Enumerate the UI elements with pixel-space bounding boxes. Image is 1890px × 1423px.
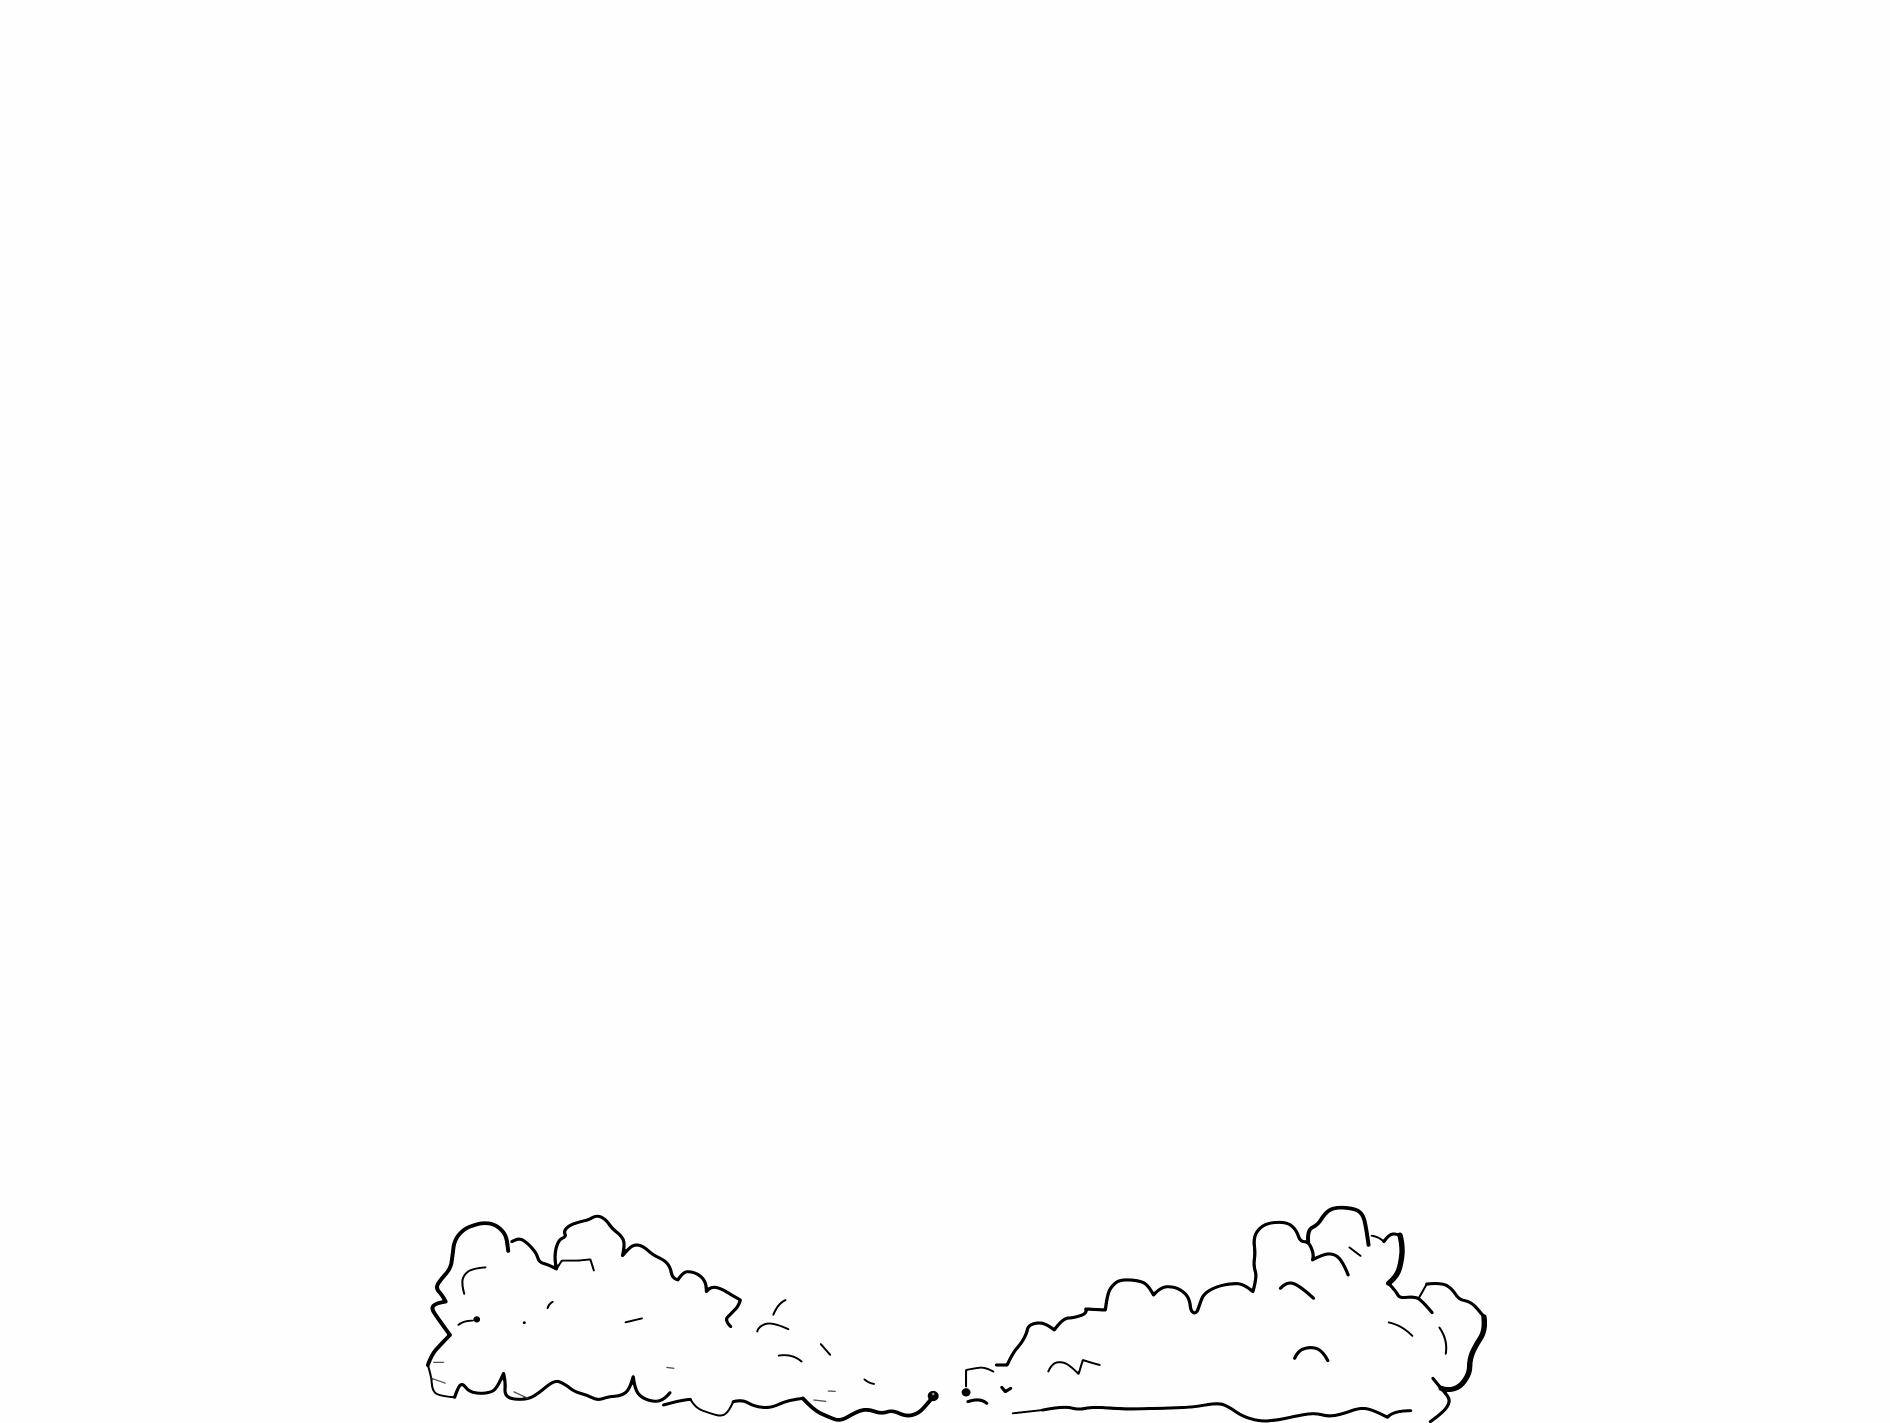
right cloud: top outline [966, 1208, 1484, 1422]
right cloud: bottom outline [1012, 1404, 1411, 1421]
left cloud: interior ink marks [431, 1267, 874, 1401]
left cloud: bottom outline [428, 1365, 939, 1420]
left cloud: top outline [428, 1216, 740, 1365]
right cloud: interior ink marks [962, 1247, 1446, 1403]
right cloud [962, 1208, 1484, 1422]
left cloud [428, 1216, 939, 1420]
